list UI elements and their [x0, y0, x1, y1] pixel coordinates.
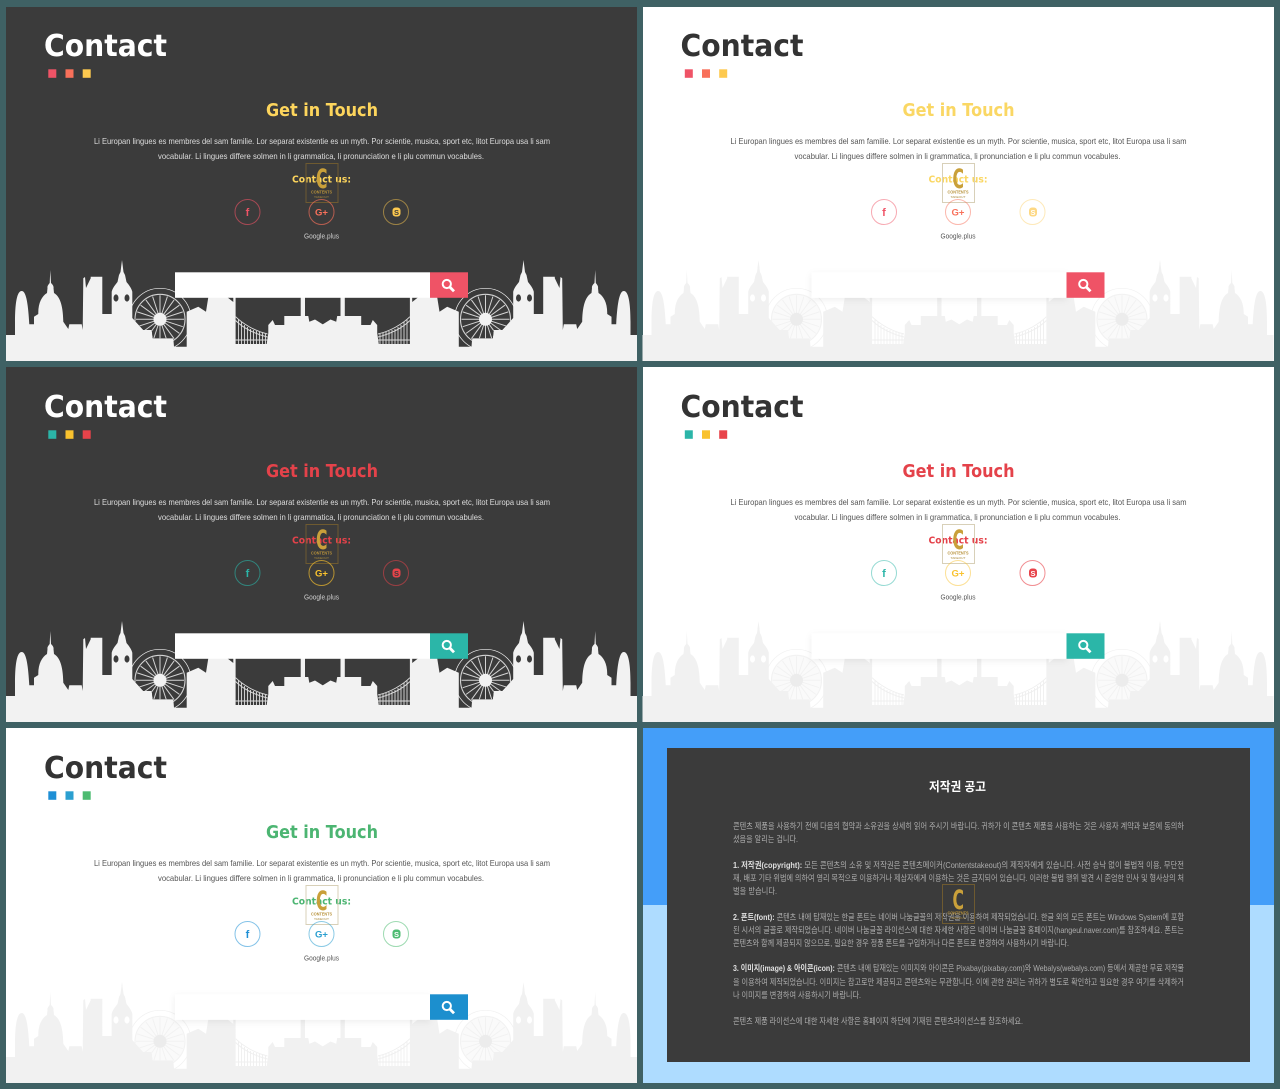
section 3: image and icon: 을 이용하여 제작되었습니다. 이미지는 참고로만 제공되고 콘텐츠와는 무관합니다. 이에 관한 권리는 귀하가 별도로 확인하고 필요한 경우 여기를 삭제하거	[733, 977, 1184, 987]
body text: vocabular. Li lingues differe solmen in li grammatica, li pronunciation e li plu commun vocabules.	[794, 151, 1120, 161]
subheading: Get in Touch	[266, 822, 378, 843]
icon: skype	[384, 560, 408, 586]
icon: skype	[384, 922, 408, 946]
copyright intro: 콘텐츠 제품을 사용하기 전에 다음의 협약과 소유권을 상세히 읽어 주시기 바랍니다. 귀하가 이 콘텐츠 제품을 사용하는 것은 사용자 계약과 보증에 동의하	[733, 821, 1184, 831]
body text	[94, 136, 550, 161]
section 1: copyright: 벌을 받습니다.	[733, 886, 777, 896]
body text: Li Europan lingues es membres del sam familie. Lor separat existentie es un myth. Por scientie, musica, sport etc, litot Europa usa li sam	[94, 497, 550, 507]
search bar	[812, 633, 1104, 659]
icon label: Google.plus	[304, 954, 339, 962]
body text	[94, 497, 550, 522]
icon: skype: S	[1030, 569, 1036, 578]
watermark: CONTENTS	[311, 190, 333, 196]
body text: vocabular. Li lingues differe solmen in li grammatica, li pronunciation e li plu commun vocabules.	[158, 151, 484, 161]
icon label: Google.plus	[940, 592, 976, 602]
icon: facebook: f	[246, 568, 250, 580]
icon: google plus	[946, 200, 970, 224]
icon: facebook: f	[246, 207, 250, 219]
icon: facebook: f	[882, 207, 886, 219]
section 1: copyright: 재, 배포 기타 위법에 의하여 영리 목적으로 이용하거나 제삼자에게 이용하는 것은 금지되어 있습니다. 이러한 불법 행위 발견 시 준엄한 민사 및 형사상의 처	[733, 873, 1184, 883]
section 3: image and icon: 3. 이미지(image) & 아이콘(icon): 콘텐츠 내에 탑재있는 이미지와 아이콘은 Pixabay(pixabay.com)와 Webalys(webalys.com) 등에서 제공한 무료 저작물	[733, 963, 1184, 973]
panel: dark contact slide, warm palette	[6, 7, 640, 361]
icon: facebook	[872, 200, 896, 224]
icon: google plus: G+	[315, 930, 328, 940]
heading: Contact	[680, 390, 804, 425]
watermark: TAKEOUT	[314, 195, 329, 199]
skyline	[6, 260, 640, 361]
icon: facebook	[235, 922, 260, 946]
icon label: Google.plus	[940, 232, 976, 240]
icon: google plus: G+	[315, 208, 328, 218]
icon: google plus: G+	[952, 208, 965, 218]
icon: skype: S	[394, 930, 399, 939]
panel: dark contact slide, teal palette	[6, 367, 640, 722]
icon: skype: S	[1030, 208, 1036, 217]
watermark: C	[316, 164, 328, 195]
icon: google plus: G+	[315, 568, 328, 580]
subheading: Get in Touch	[902, 100, 1014, 121]
watermark: CONTENTS	[311, 550, 333, 556]
contact us label: Contact us:	[928, 536, 988, 546]
watermark	[942, 164, 974, 202]
skyline	[642, 621, 1276, 722]
skyline	[6, 982, 640, 1083]
icon: facebook	[872, 560, 896, 586]
icon: google plus	[309, 560, 334, 586]
skyline	[642, 260, 1276, 361]
panel: light contact slide, teal palette	[642, 367, 1276, 722]
icon: skype	[1020, 560, 1045, 586]
icon: facebook: f	[882, 568, 886, 580]
watermark: TAKEOUT	[950, 916, 966, 920]
watermark: CONTENTS	[948, 910, 969, 916]
watermark: TAKEOUT	[950, 195, 966, 199]
body text: vocabular. Li lingues differe solmen in li grammatica, li pronunciation e li plu commun vocabules.	[158, 512, 484, 522]
subheading: Get in Touch	[902, 461, 1014, 482]
panel: light contact slide, warm palette	[642, 7, 1276, 361]
watermark	[306, 164, 338, 202]
contact us label: Contact us:	[292, 174, 351, 186]
heading: Contact	[680, 29, 804, 64]
section 2: font	[733, 912, 1184, 948]
body text	[94, 858, 550, 883]
watermark: CONTENTS	[311, 912, 333, 918]
icon: skype	[1020, 200, 1045, 224]
section 2: font: 콘텐츠와 함께 제공되지 않으므로, 필요한 경우 정품 폰트를 구입하거나 다른 폰트로 변경하여 사용하시기 바랍니다.	[733, 938, 1069, 948]
copyright title: 저작권 공고	[929, 779, 986, 794]
contact us label: Contact us:	[928, 174, 988, 186]
watermark	[306, 886, 338, 924]
contact us label: Contact us:	[292, 896, 351, 908]
accent squares	[48, 69, 91, 78]
body text: Li Europan lingues es membres del sam familie. Lor separat existentie es un myth. Por scientie, musica, sport etc, litot Europa usa li sam	[730, 136, 1187, 146]
accent squares	[685, 69, 727, 78]
body text: Li Europan lingues es membres del sam familie. Lor separat existentie es un myth. Por scientie, musica, sport etc, litot Europa usa li sam	[730, 497, 1187, 507]
accent squares	[685, 430, 727, 439]
body text: Li Europan lingues es membres del sam familie. Lor separat existentie es un myth. Por scientie, musica, sport etc, litot Europa usa li sam	[94, 136, 550, 146]
subheading: Get in Touch	[266, 100, 378, 121]
watermark: CONTENTS	[948, 190, 969, 196]
body text	[730, 497, 1187, 522]
body text: Li Europan lingues es membres del sam familie. Lor separat existentie es un myth. Por scientie, musica, sport etc, litot Europa usa li sam	[94, 858, 550, 868]
watermark: TAKEOUT	[950, 556, 966, 560]
icon: facebook	[235, 200, 260, 224]
watermark: C	[952, 525, 964, 556]
search bar	[175, 994, 468, 1020]
watermark	[942, 884, 974, 924]
icon: google plus	[309, 200, 334, 224]
copyright intro: 셨음을 알리는 겁니다.	[733, 834, 798, 844]
icon label: Google.plus	[304, 592, 339, 602]
section 2: font: 2. 폰트(font): 콘텐츠 내에 탑재있는 한글 폰트는 네이버 나눔글꼴의 저작권을 이용하여 제작되었습니다. 한글 외의 모든 폰트는 Windows System에 포함	[733, 912, 1184, 922]
search bar	[812, 272, 1104, 298]
accent squares	[48, 791, 91, 800]
icon: facebook	[235, 560, 260, 586]
accent squares	[48, 430, 91, 439]
panel: light contact slide, blue-green palette	[6, 728, 640, 1083]
panel: copyright notice	[643, 728, 1274, 1083]
watermark: CONTENTS	[948, 550, 969, 556]
skyline	[6, 621, 640, 722]
watermark	[306, 524, 338, 564]
icon: skype	[384, 200, 408, 224]
watermark	[942, 524, 974, 564]
section 1: copyright	[733, 860, 1184, 896]
heading: Contact	[44, 390, 167, 425]
watermark: C	[952, 164, 964, 195]
icon: google plus: G+	[952, 568, 965, 580]
watermark: TAKEOUT	[314, 917, 329, 921]
section 2: font: 된 시서의 글꼴로 제작되었습니다. 네이버 나눔글꼴 라이선스에 대한 자세한 사항은 네이버 나눔글꼴 홈페이지(hangeul.naver.com)를 참조하세요. 폰트는	[733, 925, 1184, 935]
body text: vocabular. Li lingues differe solmen in li grammatica, li pronunciation e li plu commun vocabules.	[794, 512, 1120, 522]
watermark: C	[316, 525, 328, 556]
icon: google plus	[309, 922, 334, 946]
subheading: Get in Touch	[266, 461, 378, 482]
watermark: C	[316, 886, 328, 917]
heading: Contact	[44, 29, 167, 64]
icon: skype: S	[394, 208, 399, 217]
icon: google plus	[946, 560, 970, 586]
icon label: Google.plus	[304, 232, 339, 240]
icon: facebook: f	[246, 929, 250, 941]
section 3: image and icon	[733, 963, 1184, 1000]
watermark: C	[952, 885, 964, 916]
search bar	[175, 633, 468, 659]
watermark: TAKEOUT	[314, 556, 329, 560]
license note: 콘텐츠 제품 라이선스에 대한 자세한 사항은 홈페이지 하단에 기재된 콘텐츠라이선스를 참조하세요.	[733, 1016, 1023, 1026]
contact us label: Contact us:	[292, 536, 351, 546]
body text: vocabular. Li lingues differe solmen in li grammatica, li pronunciation e li plu commun vocabules.	[158, 873, 484, 883]
icon: skype: S	[394, 569, 399, 578]
section 3: image and icon: 나 이미지를 변경하여 사용하시기 바랍니다.	[733, 990, 861, 1000]
search bar	[175, 272, 468, 298]
section 1: copyright: 1. 저작권(copyright): 모든 콘텐츠의 소유 및 저작권은 콘텐츠메이커(Contentstakeout)의 제작자에게 있습니다. 사전 승낙 없이 불법적 이용, 무단전	[733, 860, 1184, 870]
heading: Contact	[44, 751, 167, 786]
body text	[730, 136, 1187, 161]
copyright intro	[733, 821, 1184, 844]
